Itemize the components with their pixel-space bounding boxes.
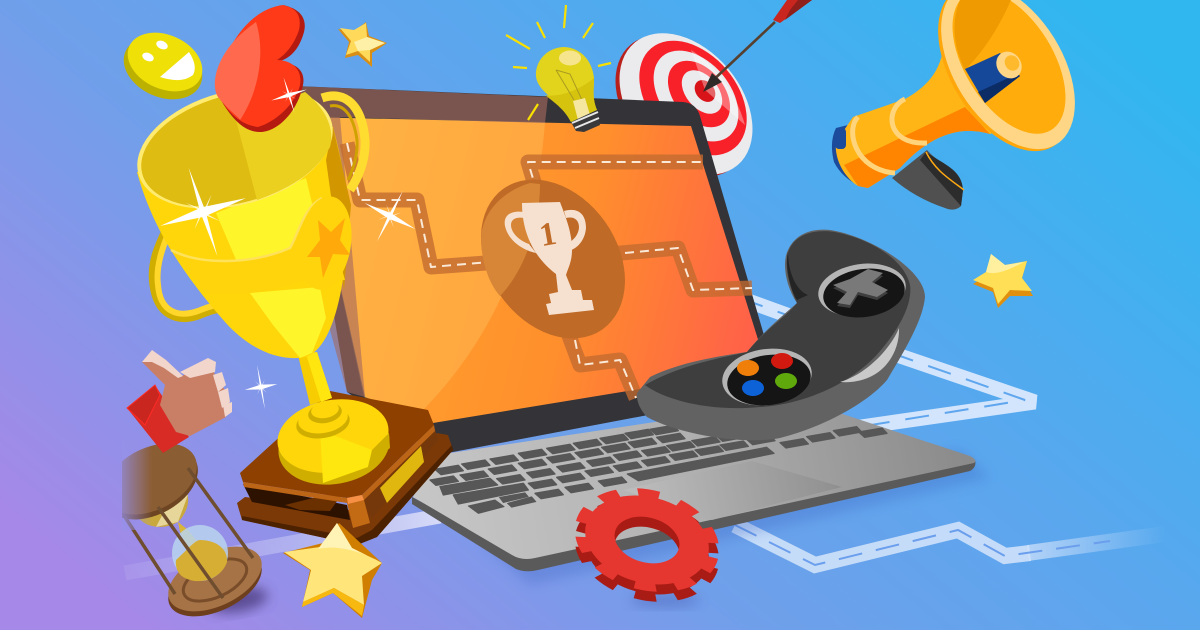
megaphone <box>832 0 1103 210</box>
cup body <box>137 127 348 358</box>
road: right loop <box>740 298 1035 430</box>
medallion <box>293 193 357 293</box>
laptop base <box>412 400 975 571</box>
gamepad <box>637 230 925 440</box>
screen frame <box>295 86 780 455</box>
bell <box>910 0 1100 175</box>
road: bottom left <box>125 516 440 573</box>
thumbs up <box>127 350 232 453</box>
gear side <box>573 490 721 610</box>
wood corner <box>347 495 370 528</box>
sparkle near thumb <box>241 362 281 412</box>
top disc <box>122 462 198 520</box>
wood base right side <box>362 426 438 518</box>
arrow <box>703 0 812 92</box>
screen road <box>347 143 752 398</box>
smiley <box>114 21 212 111</box>
heart <box>215 5 312 132</box>
lightbulb <box>506 5 611 132</box>
button <box>835 128 846 149</box>
trophy stem <box>298 352 332 405</box>
right star <box>973 254 1033 308</box>
wood base lower plate <box>237 433 453 545</box>
gear face <box>573 480 721 600</box>
laptop shadow <box>480 450 990 585</box>
trophy <box>124 67 453 545</box>
heart sparkle <box>266 72 312 118</box>
road: bottom right <box>735 525 1165 565</box>
cup rim <box>124 67 346 229</box>
rings <box>853 117 895 173</box>
cup inside <box>128 72 342 226</box>
gear <box>573 480 721 610</box>
frame glare <box>295 86 548 397</box>
glass bottom <box>172 525 228 581</box>
glass top <box>140 494 188 527</box>
wood base rim <box>243 425 435 503</box>
handle <box>892 150 964 210</box>
right handle <box>322 96 365 190</box>
glass neck <box>178 522 196 548</box>
d-pad well <box>815 258 909 322</box>
cup dark side <box>326 127 351 290</box>
left fade <box>122 446 150 530</box>
keyboard <box>430 425 887 513</box>
trophy foot <box>272 391 396 493</box>
hand <box>142 352 230 436</box>
screen sparkle <box>352 178 428 254</box>
cup highlight <box>216 178 326 358</box>
top star <box>338 22 387 67</box>
body <box>836 42 1000 188</box>
cup band <box>171 198 345 294</box>
hourglass <box>122 444 273 620</box>
screen glare <box>303 117 545 427</box>
gamepad body <box>637 230 925 440</box>
medallion star <box>307 218 350 278</box>
shadow <box>206 583 270 617</box>
touchpad <box>623 461 842 520</box>
cup sparkle <box>146 154 260 270</box>
screen badge <box>451 152 655 366</box>
cuff <box>127 385 189 453</box>
cap <box>832 125 860 186</box>
bottom disc <box>168 567 262 616</box>
bottom star <box>283 523 382 618</box>
wood base dark side <box>243 484 350 520</box>
trophy on screen <box>505 202 594 315</box>
rods <box>125 468 253 598</box>
left handle <box>153 218 235 318</box>
laptop <box>295 86 990 585</box>
target <box>588 7 780 203</box>
driver <box>965 53 1020 103</box>
wood base top <box>240 391 434 498</box>
buttons well <box>719 343 815 411</box>
plaque <box>380 446 424 503</box>
screen display <box>303 117 767 423</box>
number one: 1 <box>537 216 559 254</box>
